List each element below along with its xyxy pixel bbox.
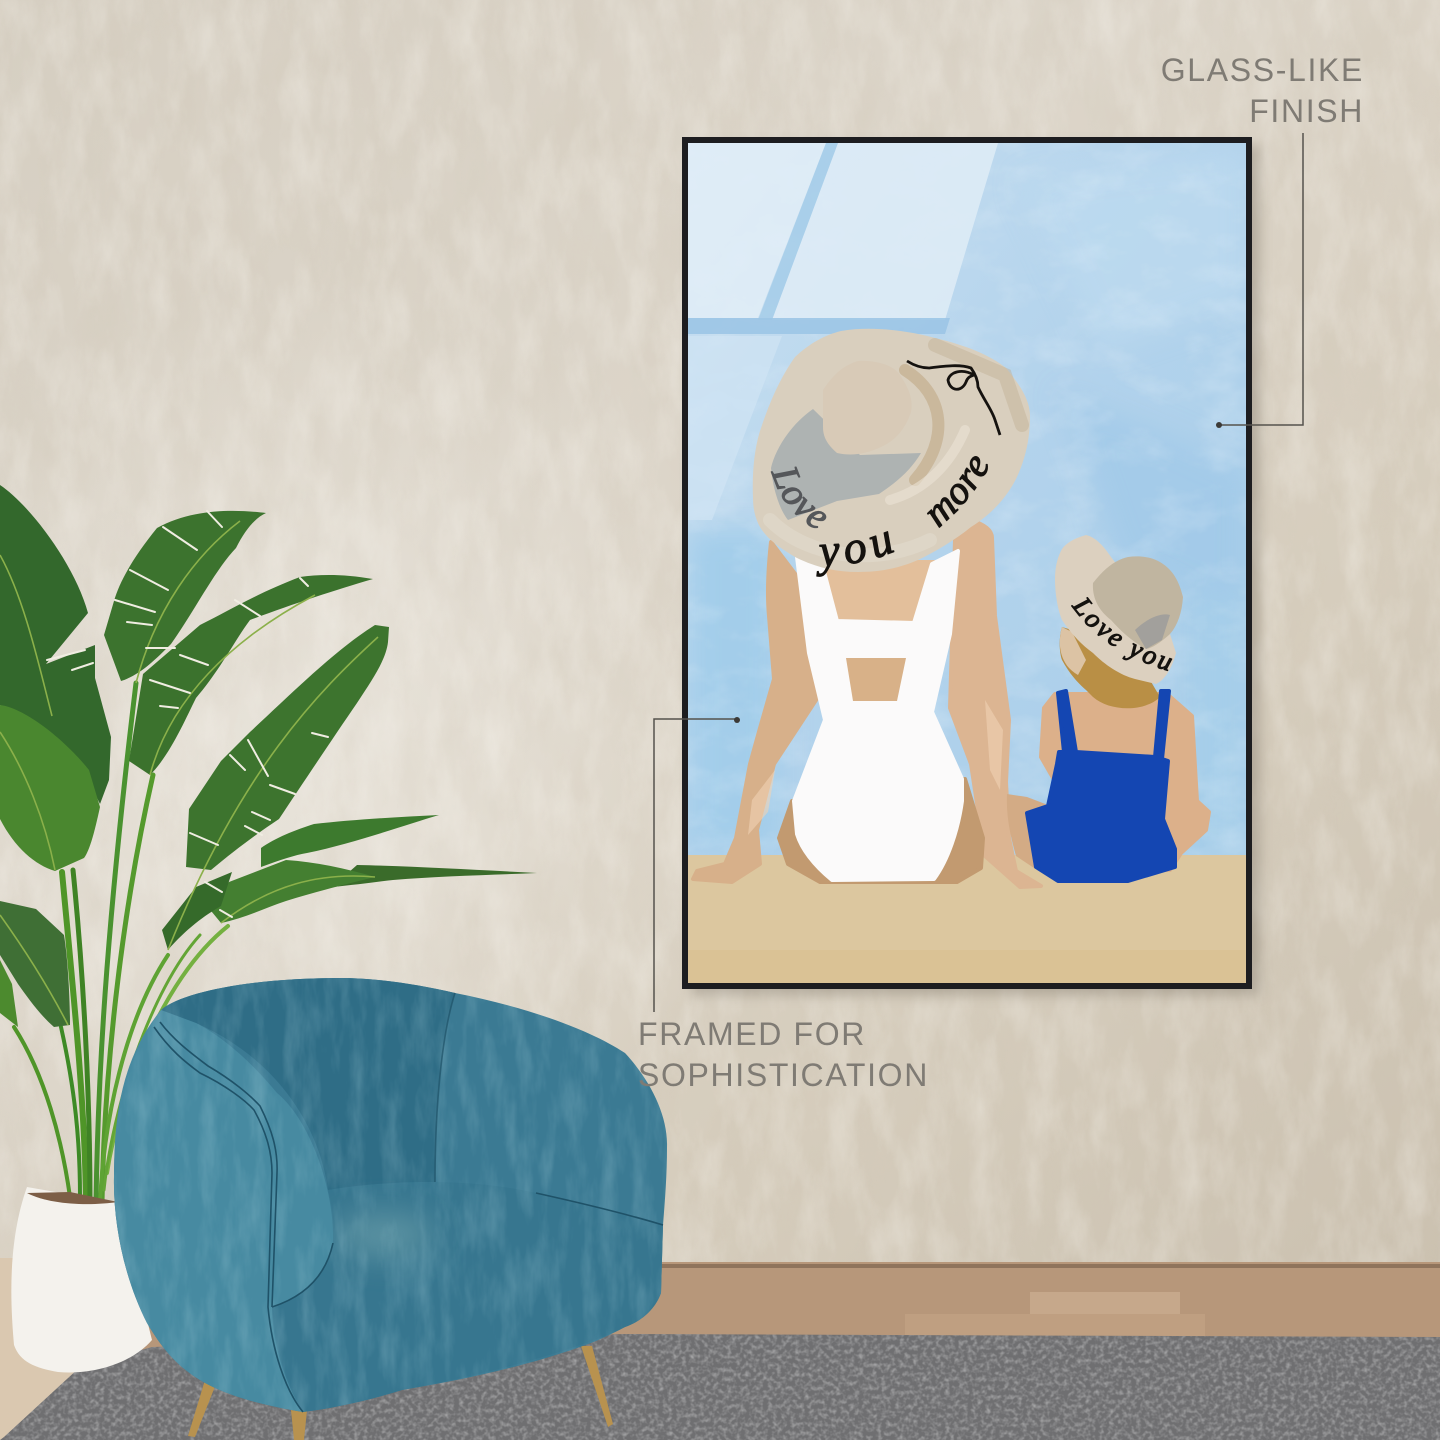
- leaf: low stub: [162, 872, 232, 950]
- child hat shading: [1135, 614, 1170, 649]
- left arm: [693, 542, 820, 882]
- wooden floor: [0, 1258, 1440, 1440]
- brush clouds: [688, 231, 1236, 851]
- legs: [779, 779, 983, 882]
- frame shadow: [692, 145, 1260, 995]
- armchair: [114, 978, 667, 1440]
- leaf: second centre: [129, 575, 373, 775]
- hat script ribbon: [907, 361, 1000, 435]
- child hat lettering: Love you: [1071, 597, 1172, 672]
- hat crown: [823, 419, 859, 454]
- sky: [688, 143, 1246, 863]
- callout: framed for sophistication: SOPHISTICATION: [638, 1057, 929, 1093]
- plant pot: [11, 1187, 152, 1373]
- chair seams: [154, 993, 663, 1412]
- leaf: tall right: [186, 625, 389, 870]
- chair body: [114, 978, 667, 1412]
- black frame: [682, 137, 1252, 989]
- right arm: [950, 520, 1041, 887]
- seat highlight: [335, 1213, 435, 1257]
- child head and hair: [1060, 627, 1160, 708]
- plant stems: [14, 683, 228, 1202]
- child hat crown: [1093, 556, 1183, 649]
- hat brim: [753, 329, 1030, 572]
- hat shadow: [771, 409, 921, 520]
- leaf: left large: [0, 705, 100, 871]
- child hat brim: [1055, 535, 1176, 684]
- framed artwork: [682, 137, 1265, 1000]
- leaf midribs: [0, 521, 378, 1025]
- callout: glass-like finish: FINISH: [1249, 93, 1364, 129]
- hat lettering: more: [926, 456, 988, 528]
- back cut-out: [846, 658, 906, 701]
- hat lettering: Love: [770, 466, 826, 528]
- chair seat: [272, 1182, 663, 1412]
- leaf: longest low: [332, 865, 537, 887]
- upper back: [825, 560, 935, 621]
- leaf: top centre: [104, 511, 266, 681]
- child far leg: [1007, 794, 1048, 870]
- leaf tears: [47, 511, 328, 917]
- grey shag rug: [0, 1334, 1440, 1440]
- blue romper: [1027, 691, 1175, 881]
- callout: glass-like finish: [1161, 52, 1364, 428]
- child face: [1060, 627, 1086, 675]
- sand: [688, 855, 1246, 983]
- chair arm: [114, 1010, 333, 1412]
- mother figure: [691, 328, 1043, 889]
- chair inner back: [161, 978, 455, 1190]
- child body: [1041, 694, 1209, 870]
- chair legs: [188, 1346, 613, 1440]
- painting: [688, 143, 1246, 983]
- window reflection: [688, 143, 998, 520]
- brush texture: [688, 143, 1246, 863]
- leaf: low mid: [207, 860, 375, 923]
- skin shading: [748, 700, 1003, 835]
- leaf: edge sliver: [0, 960, 18, 1027]
- white swimsuit: [794, 551, 962, 880]
- hat lettering: you: [816, 531, 894, 577]
- hat brim strokes: [770, 345, 1022, 555]
- leaf: upper left: [0, 485, 111, 804]
- chair velvet texture: [114, 978, 667, 1412]
- plant: [0, 485, 537, 1202]
- leaf: far left low: [0, 901, 70, 1027]
- leaf: lower right: [261, 815, 439, 867]
- large hat: [752, 328, 1030, 577]
- child hat: [1055, 535, 1183, 684]
- callout: framed for sophistication: FRAMED FOR: [638, 1016, 866, 1052]
- child figure: [1007, 535, 1211, 883]
- hat lettering: [770, 456, 988, 577]
- callout: framed for sophistication: [638, 717, 929, 1093]
- callout: glass-like finish: GLASS-LIKE: [1161, 52, 1364, 88]
